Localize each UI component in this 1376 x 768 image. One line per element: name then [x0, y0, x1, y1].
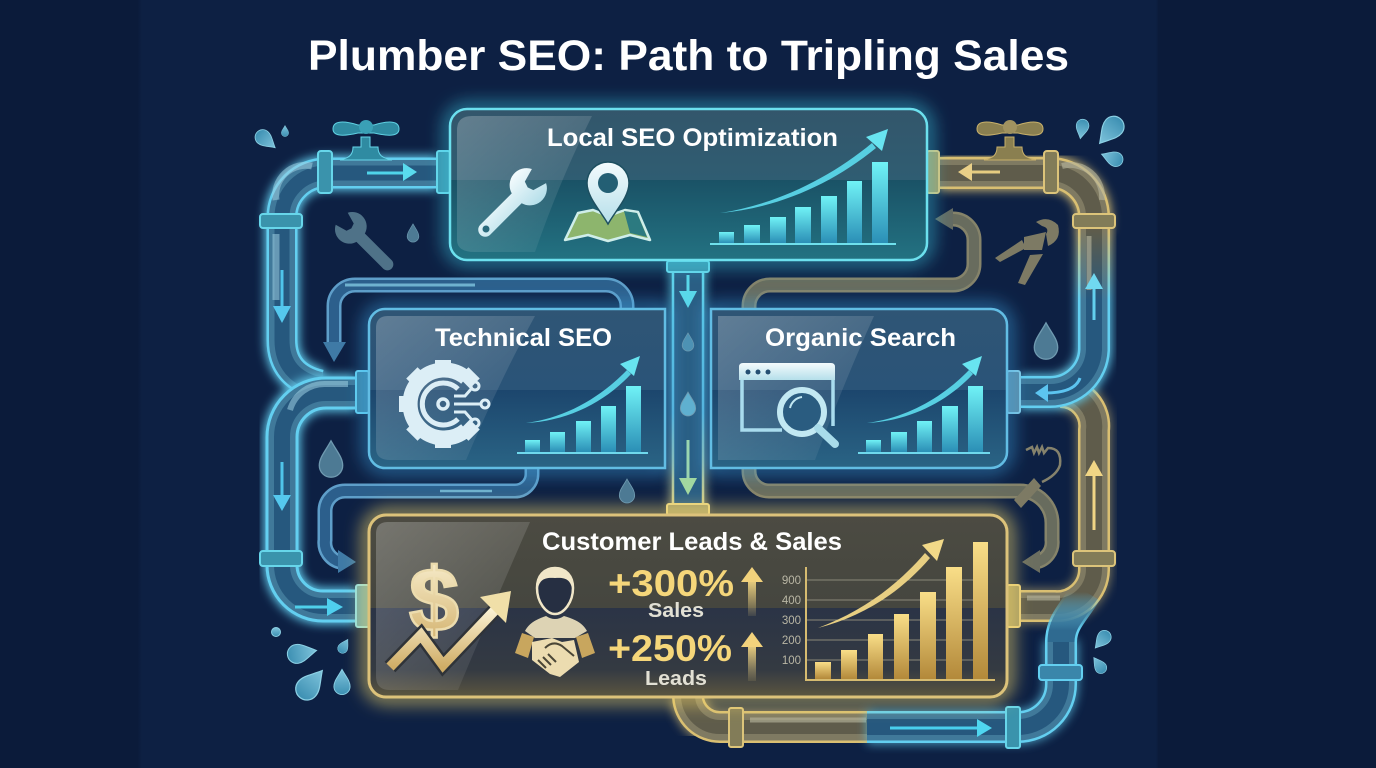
water splash: top left	[252, 125, 289, 154]
bar chart: Technical SEO growth	[517, 356, 648, 454]
pipe: lower right gold	[1007, 392, 1115, 627]
icon: browser with magnifier	[739, 363, 835, 444]
stat: +250% Leads: +250%	[608, 628, 732, 669]
panel: Technical SEO	[369, 309, 665, 468]
bar chart: sales and leads growth: 300	[782, 615, 801, 627]
pipe: dim blue loop above Technical SEO	[323, 285, 627, 362]
pipe: central vertical	[667, 261, 709, 515]
pipe: bottom return gold section	[688, 697, 870, 747]
pipe: Technical SEO to left side and Customer Leads	[260, 371, 369, 627]
stat: +250% Leads	[608, 628, 763, 690]
bar chart: sales and leads growth: 400	[782, 595, 801, 607]
water splash: bottom right	[1089, 628, 1114, 676]
panel: Organic Search	[711, 309, 1007, 468]
bar chart: sales and leads growth	[782, 539, 995, 680]
water splash: bottom left	[272, 628, 352, 705]
panel: Customer Leads & Sales	[369, 515, 1007, 697]
heading: Local SEO Optimization: Local SEO Optimization	[547, 124, 838, 152]
stat: +250% Leads: Leads	[645, 668, 707, 690]
icon: map pin	[565, 162, 650, 241]
title: Plumber SEO: Path to Tripling Sales	[308, 32, 1069, 80]
stat: +300% Sales	[608, 563, 763, 622]
bar chart: sales and leads growth: 200	[782, 635, 801, 647]
pipe: dim gold link from Organic Search to Customer Leads	[749, 468, 1052, 573]
icon: dim pliers	[995, 219, 1059, 285]
icon: person with handshake	[515, 568, 595, 677]
bar chart: Organic Search growth	[858, 356, 990, 454]
panel: Local SEO Optimization	[450, 109, 927, 260]
bar chart: sales and leads growth: 100	[782, 655, 801, 667]
pipe: top left blue with faucet	[260, 120, 450, 385]
heading: Technical SEO: Technical SEO	[435, 324, 612, 352]
dim water drops	[319, 224, 1058, 503]
icon: wrench	[467, 162, 553, 248]
pipe: bottom return blue section	[867, 592, 1086, 748]
stat: +300% Sales: Sales	[648, 600, 704, 622]
bar chart: sales and leads growth: 900	[782, 575, 801, 587]
bar chart: Local SEO growth	[710, 129, 896, 245]
icon: small dim wrench	[330, 207, 403, 280]
pipe: dim blue link from Technical SEO to Customer Leads	[325, 468, 532, 573]
water splash: top right	[1074, 112, 1128, 169]
heading: Organic Search: Organic Search	[765, 324, 956, 352]
icon: dim drain snake tool	[1014, 447, 1060, 508]
icon: dollar with rising arrow: $	[409, 551, 459, 651]
stat: +300% Sales: +300%	[608, 563, 734, 604]
heading: Customer Leads & Sales: Customer Leads & Sales	[542, 528, 842, 556]
pipe: top right gold turning blue with faucet	[927, 120, 1115, 413]
icon: dollar with rising arrow	[390, 551, 511, 667]
icon: gear with circuit	[399, 360, 489, 448]
pipe: dim gold loop above Organic Search	[749, 208, 974, 310]
